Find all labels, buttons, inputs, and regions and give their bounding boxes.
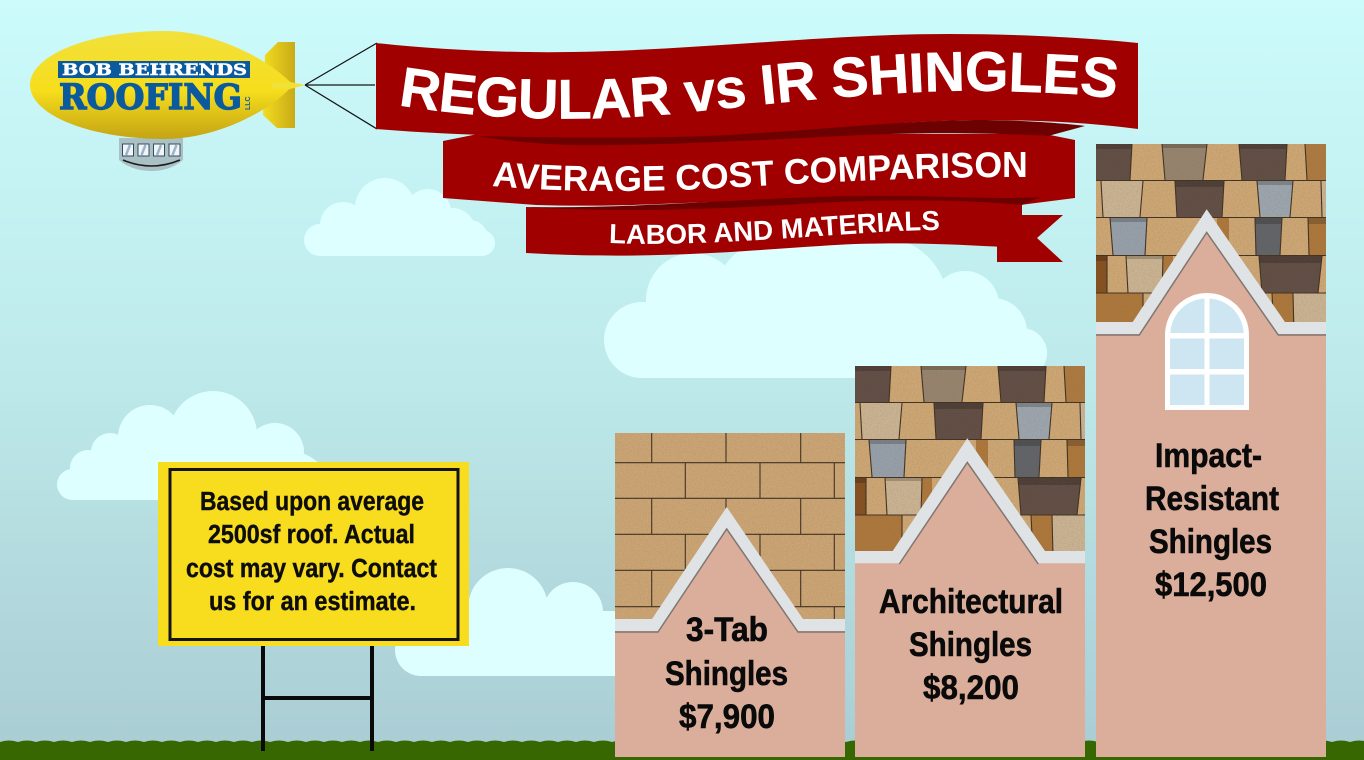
sign text: cost may vary. Contact	[186, 555, 437, 583]
impact-resistant label	[1145, 437, 1279, 604]
subtitle text: AVERAGE COST COMPARISON	[492, 152, 1026, 192]
house: 3-tab shingles	[615, 433, 845, 757]
architectural shingle roof	[855, 366, 1085, 556]
grass	[0, 739, 1364, 760]
blimp hull	[30, 31, 293, 139]
ribbon banner	[376, 34, 1138, 262]
architectural label: $8,200	[923, 669, 1019, 707]
architectural label: Architectural	[879, 583, 1063, 621]
sign border	[170, 470, 458, 640]
architectural wall	[855, 462, 1085, 757]
yard sign	[158, 462, 469, 751]
ribbon tail	[997, 215, 1063, 262]
fold shadow lower	[526, 196, 1040, 210]
blimp tail fin	[263, 42, 295, 128]
house: architectural shingles	[855, 366, 1085, 757]
cloud: large centre	[604, 237, 1047, 378]
impact-resistant label: Resistant	[1145, 480, 1279, 518]
impact-resistant wall	[1096, 232, 1326, 757]
sign text: Based upon average	[200, 488, 424, 516]
sign board	[158, 462, 469, 646]
title text: REGULAR vs IR SHINGLES	[401, 51, 1117, 119]
architectural label	[879, 583, 1063, 707]
house: impact-resistant shingles	[1096, 144, 1326, 757]
logo: Roofing: ROOFING	[59, 77, 242, 118]
logo: Bob Behrends: BOB BEHRENDS	[62, 60, 247, 79]
sign text: us for an estimate.	[209, 588, 416, 616]
logo: name bar	[58, 61, 250, 78]
3-tab label	[665, 611, 788, 736]
banner: labor and materials	[526, 198, 1022, 256]
fold shadow upper	[478, 120, 1085, 145]
impact-resistant shingle roof	[1096, 144, 1326, 334]
sign legs	[261, 646, 374, 751]
cloud: top	[304, 178, 495, 256]
blimp gondola	[119, 138, 183, 171]
architectural label: Shingles	[909, 626, 1032, 664]
3-tab shingle roof	[615, 433, 845, 623]
banner: average cost comparison	[443, 134, 1075, 206]
sub-subtitle text: LABOR AND MATERIALS	[610, 210, 939, 244]
3-tab gable trim	[615, 507, 845, 631]
sign text: 2500sf roof. Actual	[208, 521, 415, 549]
impact-resistant label: Impact-	[1155, 437, 1262, 475]
impact-resistant label: $12,500	[1155, 566, 1267, 604]
impact-resistant gable trim	[1096, 209, 1326, 334]
cloud: lower	[395, 568, 625, 676]
sign text	[186, 488, 437, 616]
impact-resistant label: Shingles	[1149, 523, 1272, 561]
blimp	[30, 31, 377, 171]
cloud: left	[57, 391, 335, 550]
blimp tow lines	[305, 43, 377, 129]
3-tab label: $7,900	[679, 698, 775, 736]
3-tab label: Shingles	[665, 655, 788, 693]
logo: LLC: LLC	[245, 96, 252, 110]
architectural gable trim	[855, 438, 1085, 563]
banner: title	[376, 34, 1138, 137]
3-tab label: 3-Tab	[686, 611, 768, 649]
logo	[58, 60, 252, 118]
3-tab wall	[615, 528, 845, 757]
blimp nose spindle	[272, 82, 305, 89]
arched window	[1165, 293, 1249, 410]
